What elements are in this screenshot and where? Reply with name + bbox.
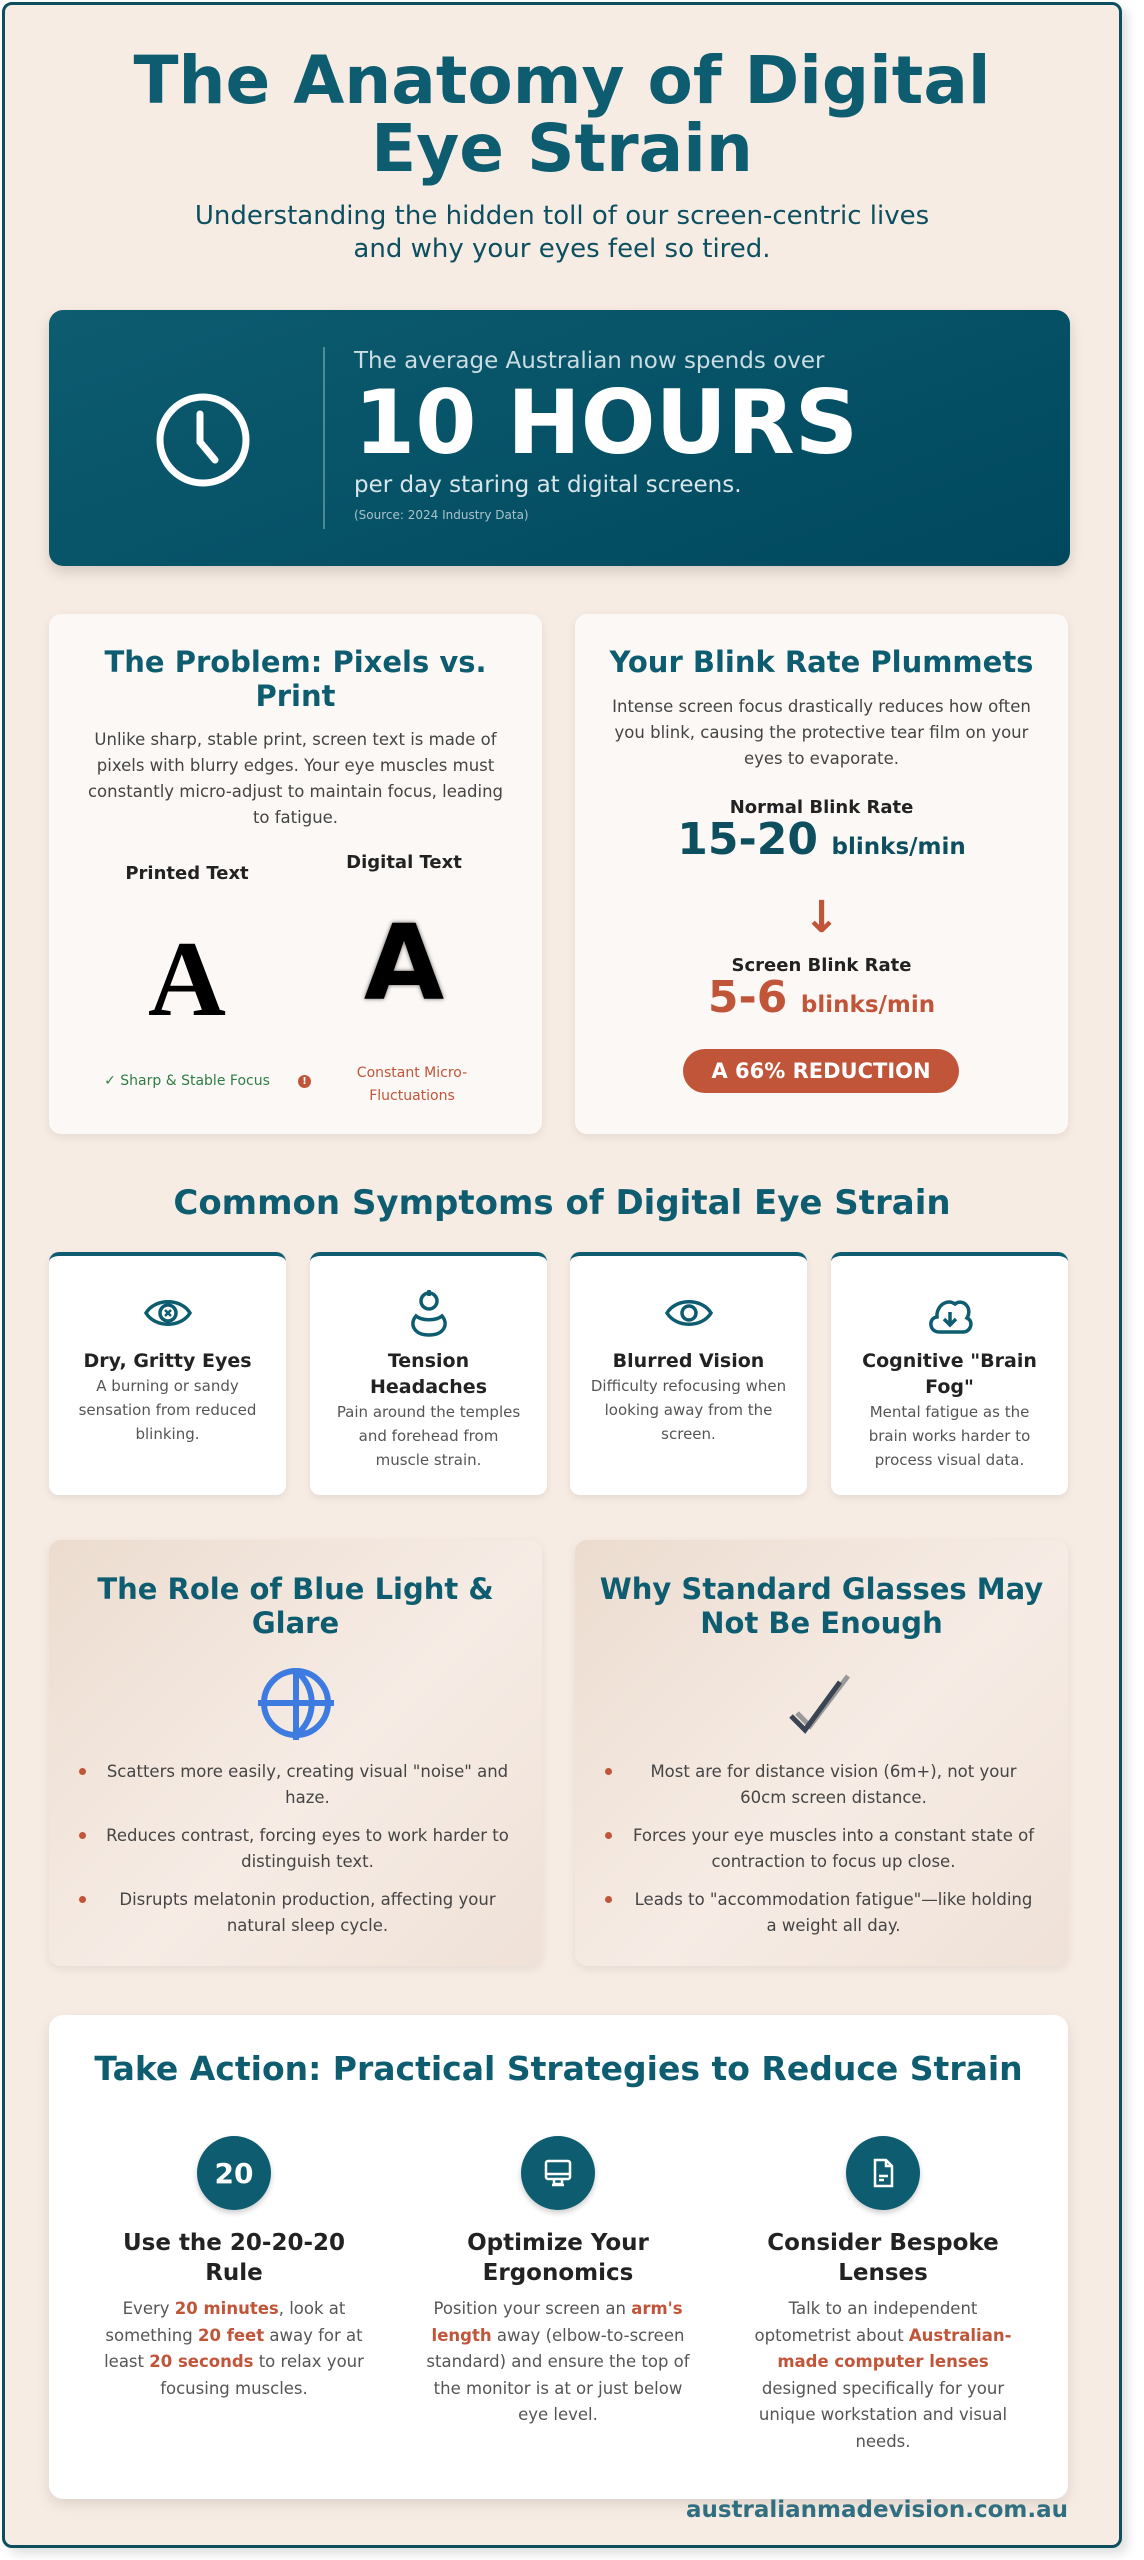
strategy: 20-20-20 <box>104 2136 364 2398</box>
strategy: 20-20-20: Rule <box>205 2260 263 2286</box>
bullet list <box>605 1762 1034 1935</box>
strategy: lenses: Consider Bespoke <box>767 2230 999 2256</box>
icon: warning: ! <box>302 1076 307 1087</box>
heading: Not Be Enough <box>700 1606 943 1640</box>
icon: head <box>411 1290 447 1337</box>
banner text: per day staring at digital screens. <box>354 472 742 498</box>
printed text example <box>125 863 249 1039</box>
panel: blink rate <box>575 614 1068 1134</box>
pill: 66% reduction <box>683 1049 959 1093</box>
heading <box>104 645 486 713</box>
banner text: The average Australian now spends over <box>354 348 824 374</box>
bullet list: Disrupts melatonin production, affecting your natural sleep cycle. <box>119 1890 496 1935</box>
heading: Glare <box>252 1606 339 1640</box>
heading: The Role of Blue Light & <box>97 1572 494 1606</box>
arrow: ↓ <box>803 892 840 943</box>
heading <box>97 1572 494 1640</box>
heading: Why Standard Glasses May <box>600 1572 1043 1606</box>
symptom: dry eyes: Dry, Gritty Eyes <box>83 1350 252 1372</box>
icon: 20 <box>197 2136 271 2210</box>
symptom: headaches: Tension <box>388 1350 469 1372</box>
title <box>133 42 991 187</box>
caption: fluctuations <box>357 1065 467 1104</box>
symptom: dry eyes <box>49 1252 286 1495</box>
bullet list: Forces your eye muscles into a constant state of contraction to focus up close. <box>633 1826 1034 1871</box>
symptom: blurred <box>570 1252 807 1495</box>
icon: clock <box>156 394 250 486</box>
heading <box>600 1572 1043 1640</box>
strategy: lenses: Lenses <box>838 2260 928 2286</box>
strategy: ergonomics: Optimize Your <box>467 2230 649 2256</box>
strategy: ergonomics: Ergonomics <box>483 2260 633 2286</box>
heading: Print <box>255 679 336 713</box>
title: The Anatomy of Digital <box>133 42 991 119</box>
footer url: australianmadevision.com.au <box>686 2497 1068 2523</box>
icon: 20: 20 <box>215 2156 253 2190</box>
bullet list: Most are for distance vision (6m+), not your 60cm screen distance. <box>650 1762 1017 1807</box>
caption: sharp: ✓ Sharp & Stable Focus <box>104 1073 270 1089</box>
symptom: headaches: Pain around the temples and forehead from muscle strain. <box>337 1403 520 1469</box>
pill: 66% reduction: A 66% REDUCTION <box>711 1059 931 1083</box>
icon: cloud <box>929 1300 973 1334</box>
symptom: dry eyes: A burning or sandy sensation from reduced blinking. <box>79 1377 256 1443</box>
icon: monitor <box>521 2136 595 2210</box>
digital text example <box>346 852 462 1024</box>
strategy: lenses <box>755 2136 1011 2450</box>
heading: symptoms: Common Symptoms of Digital Eye Strain <box>173 1183 951 1223</box>
panel: pixels vs print <box>49 614 542 1134</box>
symptom: brain fog: Mental fatigue as the brain works harder to process visual data. <box>869 1403 1030 1469</box>
text: Unlike sharp, stable print, screen text is made of pixels with blurry edges. Your eye muscles must constantly micro-adjust to maintain focus, leading to fatigue. <box>88 730 503 827</box>
heading: The Problem: Pixels vs. <box>104 645 486 679</box>
heading: Take Action: Practical Strategies to Reduce Strain <box>94 2049 1023 2088</box>
panel: take action <box>49 2015 1068 2499</box>
banner: 10 hours <box>49 310 1070 566</box>
printed text example: A <box>148 920 226 1039</box>
icon: globe <box>258 1668 334 1740</box>
symptom: brain fog: Fog" <box>925 1376 974 1398</box>
subtitle <box>195 201 929 264</box>
symptom: headaches <box>310 1252 547 1495</box>
title: Eye Strain <box>371 110 753 187</box>
bullet list <box>79 1762 509 1935</box>
normal rate: Normal Blink Rate <box>730 797 913 818</box>
bullet list: Reduces contrast, forcing eyes to work harder to distinguish text. <box>106 1826 509 1871</box>
screen rate: Screen Blink Rate <box>732 955 911 976</box>
bullet list: Scatters more easily, creating visual "noise" and haze. <box>107 1762 508 1807</box>
panel: blue light <box>49 1540 542 1966</box>
text: Intense screen focus drastically reduces how often you blink, causing the protective tear film on your eyes to evaporate. <box>612 697 1031 768</box>
bullet list: Leads to "accommodation fatigue"—like holding a weight all day. <box>635 1890 1032 1935</box>
digital text example: Digital Text <box>346 852 462 873</box>
panel: standard glasses <box>575 1540 1068 1966</box>
heading: Your Blink Rate Plummets <box>610 645 1033 679</box>
subtitle: and why your eyes feel so tired. <box>353 234 771 264</box>
icon: double check <box>789 1674 850 1734</box>
symptom: blurred: Blurred Vision <box>613 1350 764 1372</box>
subtitle: Understanding the hidden toll of our screen-centric lives <box>195 201 929 231</box>
banner text: 10 HOURS <box>354 371 858 474</box>
caption: fluctuations: Constant Micro- <box>357 1065 467 1081</box>
printed text example: Printed Text <box>125 863 249 884</box>
icon: eye <box>665 1300 713 1326</box>
strategy: ergonomics: Position your screen an arm's length away (elbow-to-screen standard) and ensure the top of the monitor is at or just below eye level. <box>426 2299 690 2424</box>
symptom: brain fog: Cognitive "Brain <box>862 1350 1037 1372</box>
caption: fluctuations: Fluctuations <box>369 1088 455 1104</box>
banner text <box>354 348 858 522</box>
icon: warning <box>298 1075 311 1088</box>
icon: document <box>846 2136 920 2210</box>
strategy: ergonomics <box>426 2136 690 2424</box>
digital text example: A <box>364 902 444 1024</box>
icon: eye x <box>144 1300 192 1326</box>
strategy: 20-20-20: Use the 20-20-20 <box>123 2230 345 2256</box>
screen rate: 5-6 blinks/min <box>708 972 935 1023</box>
strategy: lenses: Talk to an independent optometrist about Australian-made computer lenses designed specifically for your unique workstation and visual needs. <box>755 2299 1011 2450</box>
symptom: blurred: Difficulty refocusing when looking away from the screen. <box>591 1377 786 1443</box>
symptom: brain fog <box>831 1252 1068 1495</box>
normal rate: 15-20 blinks/min <box>677 814 966 865</box>
strategy: 20-20-20: Every 20 minutes, look at something 20 feet away for at least 20 seconds to relax your focusing muscles. <box>104 2299 364 2398</box>
banner text: (Source: 2024 Industry Data) <box>354 508 529 522</box>
symptom: headaches: Headaches <box>370 1376 487 1398</box>
